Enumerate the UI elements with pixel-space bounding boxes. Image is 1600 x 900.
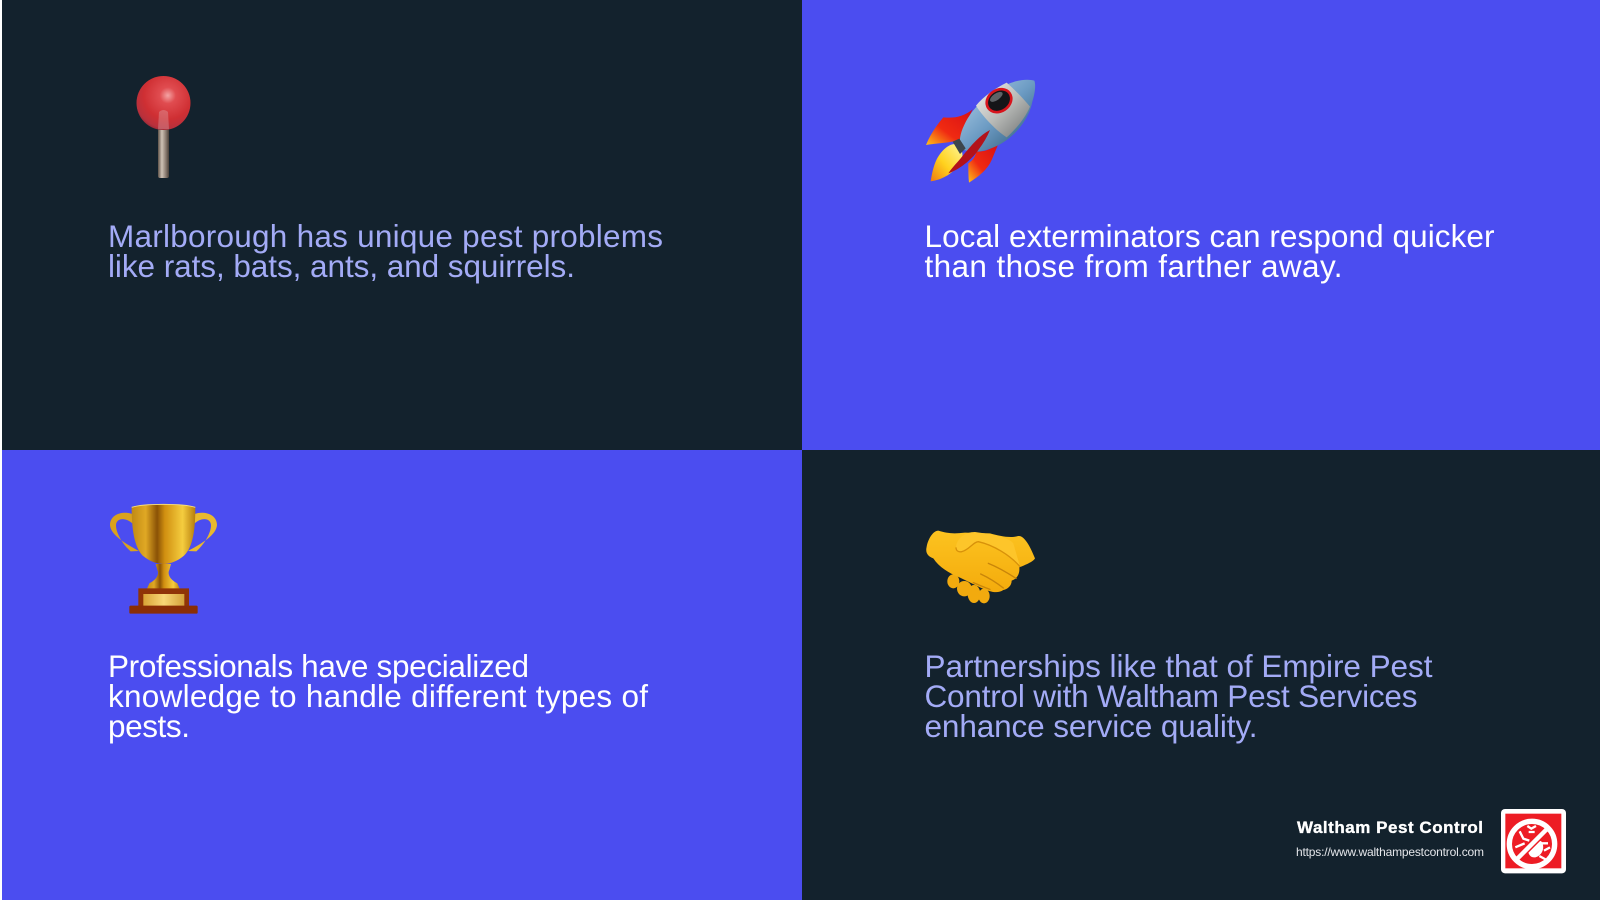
panel: local pest problems (2, 0, 802, 450)
icon: handshake (926, 531, 1035, 603)
text: quick response: than those from farther away. (924, 248, 1342, 284)
text: partnerships: enhance service quality. (924, 708, 1258, 744)
panel: specialized knowledge (2, 450, 802, 900)
text: local pest problems (108, 218, 663, 284)
text: local pest problems: like rats, bats, ants, and squirrels. (108, 248, 575, 284)
footer: brand name and URL: https://www.walthampestcontrol.com (1296, 845, 1484, 859)
text: partnerships: Control with Waltham Pest Services (924, 678, 1418, 714)
text: partnerships (924, 648, 1433, 744)
text: specialized knowledge: knowledge to handle different types of (108, 678, 648, 714)
panel: partnerships (802, 450, 1600, 900)
text: quick response: Local exterminators can respond quicker (924, 218, 1494, 254)
text: specialized knowledge (108, 648, 648, 744)
text: specialized knowledge: pests. (108, 708, 190, 744)
panel: quick response (802, 0, 1600, 450)
text: local pest problems: Marlborough has unique pest problems (108, 218, 663, 254)
footer: brand name and URL: Waltham Pest Control (1297, 818, 1483, 837)
footer: brand name and URL (1296, 818, 1484, 859)
icon: round pushpin (136, 76, 190, 178)
icon: trophy (110, 504, 217, 614)
text: specialized knowledge: Professionals have specialized (108, 648, 529, 684)
text: quick response (924, 218, 1494, 284)
icon: rocket (926, 80, 1035, 183)
icon: pest control logo (1501, 809, 1566, 873)
text: partnerships: Partnerships like that of Empire Pest (924, 648, 1433, 684)
